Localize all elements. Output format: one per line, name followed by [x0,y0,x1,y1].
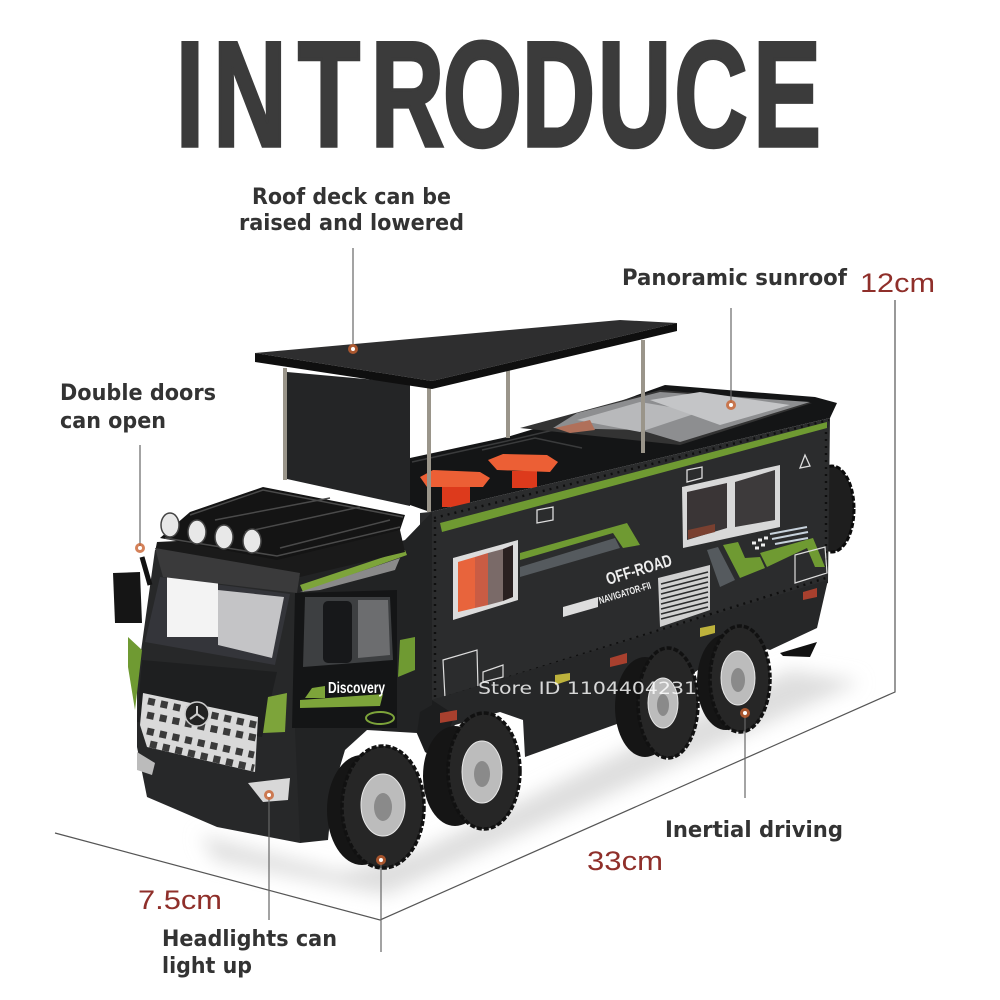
callout dots [135,344,750,865]
roof rack [160,487,405,560]
raised wall [287,372,410,506]
discovery logo [300,680,394,724]
discovery logo: Discovery [328,680,385,697]
dimension lines [55,300,895,920]
cab green trim line [300,550,407,592]
label: headlights line 2: light up [162,954,252,979]
rivet rows [434,420,829,700]
camper top deck [410,385,837,512]
marker lights [440,588,817,723]
watermark: Store ID 1104404231 [478,679,697,699]
deck tray frames [412,425,582,462]
label: sunroof: Panoramic sunroof [622,266,847,291]
label: doors: Double doors [60,381,216,406]
green graphic right [723,538,825,578]
wheel 3 [615,648,698,758]
side window left [453,540,518,620]
navigator text: NAVIGATOR-FII [598,581,653,607]
outlined hatches [443,547,827,698]
roof lights [161,513,261,553]
label: inertial driving: Inertial driving [665,818,843,843]
wheel 2 [423,713,520,829]
roof deck [255,320,677,381]
open door [292,590,397,728]
grille [140,693,258,772]
green side trim [128,637,142,710]
roof poles [285,340,643,512]
dimension: height: 12cm [860,268,935,298]
truck [113,320,854,868]
vent grille [658,565,710,627]
side window right [682,465,780,548]
dimension: length: 33cm [587,846,663,876]
rear spare tire [810,466,854,552]
fog light [137,752,155,775]
label: headlights: Headlights can [162,927,337,952]
dimension: width: 7.5cm [138,885,222,915]
green rear cab vent [398,637,415,677]
navigator label [563,597,598,617]
ground shadow [200,670,860,895]
headlight [248,778,290,802]
windshield [145,577,290,665]
label: doors line 2: can open [60,409,166,434]
label: roof deck: Roof deck can be [252,185,451,210]
green side graphic left [520,523,640,560]
cab rear fender [395,700,455,755]
panoramic sunroof [520,390,812,445]
cab side [290,512,432,843]
checker stripes [752,527,808,548]
bonnet [137,660,277,737]
wheel 4 [697,626,770,732]
off-road text: OFF-ROAD [604,551,674,589]
switch badges [537,455,810,523]
green roof stripe [440,422,827,532]
green front panel [263,693,287,733]
mirror [113,557,150,623]
rear stand [780,642,817,657]
wheel 1 [327,746,424,868]
cab roof [155,530,405,577]
title: INTRODUCE [176,12,821,179]
cab front [137,550,300,843]
grey side graphic left [520,538,620,577]
sun visor [155,548,300,593]
label: roof deck line 2: raised and lowered [239,211,464,236]
grey graphic right [707,547,735,587]
logo badge [185,702,209,726]
callout leader lines [140,248,745,952]
lower chassis skirt [415,580,828,757]
camper body side [420,418,830,710]
orange vents [420,454,558,507]
